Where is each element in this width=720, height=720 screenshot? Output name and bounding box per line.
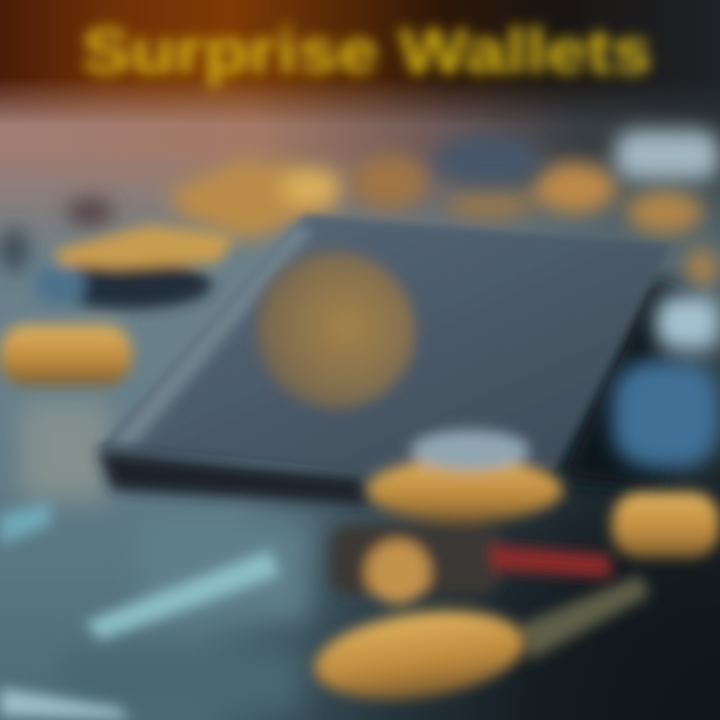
left coin stack [0, 225, 235, 385]
foreground coins [309, 430, 720, 711]
wallet [98, 215, 720, 505]
wallet front edge [98, 450, 372, 505]
right side dark shadow [560, 280, 700, 490]
wallet body [98, 215, 670, 470]
wallet left highlight [105, 222, 312, 448]
floor tone patches [20, 400, 310, 710]
blue-grey stacks, top and right [0, 130, 720, 272]
floor streaks [0, 502, 650, 720]
title: Surprise Wallets [82, 15, 652, 87]
back-row coins [66, 156, 718, 288]
right side blue stack [612, 295, 720, 468]
wallet emblem [231, 225, 441, 435]
